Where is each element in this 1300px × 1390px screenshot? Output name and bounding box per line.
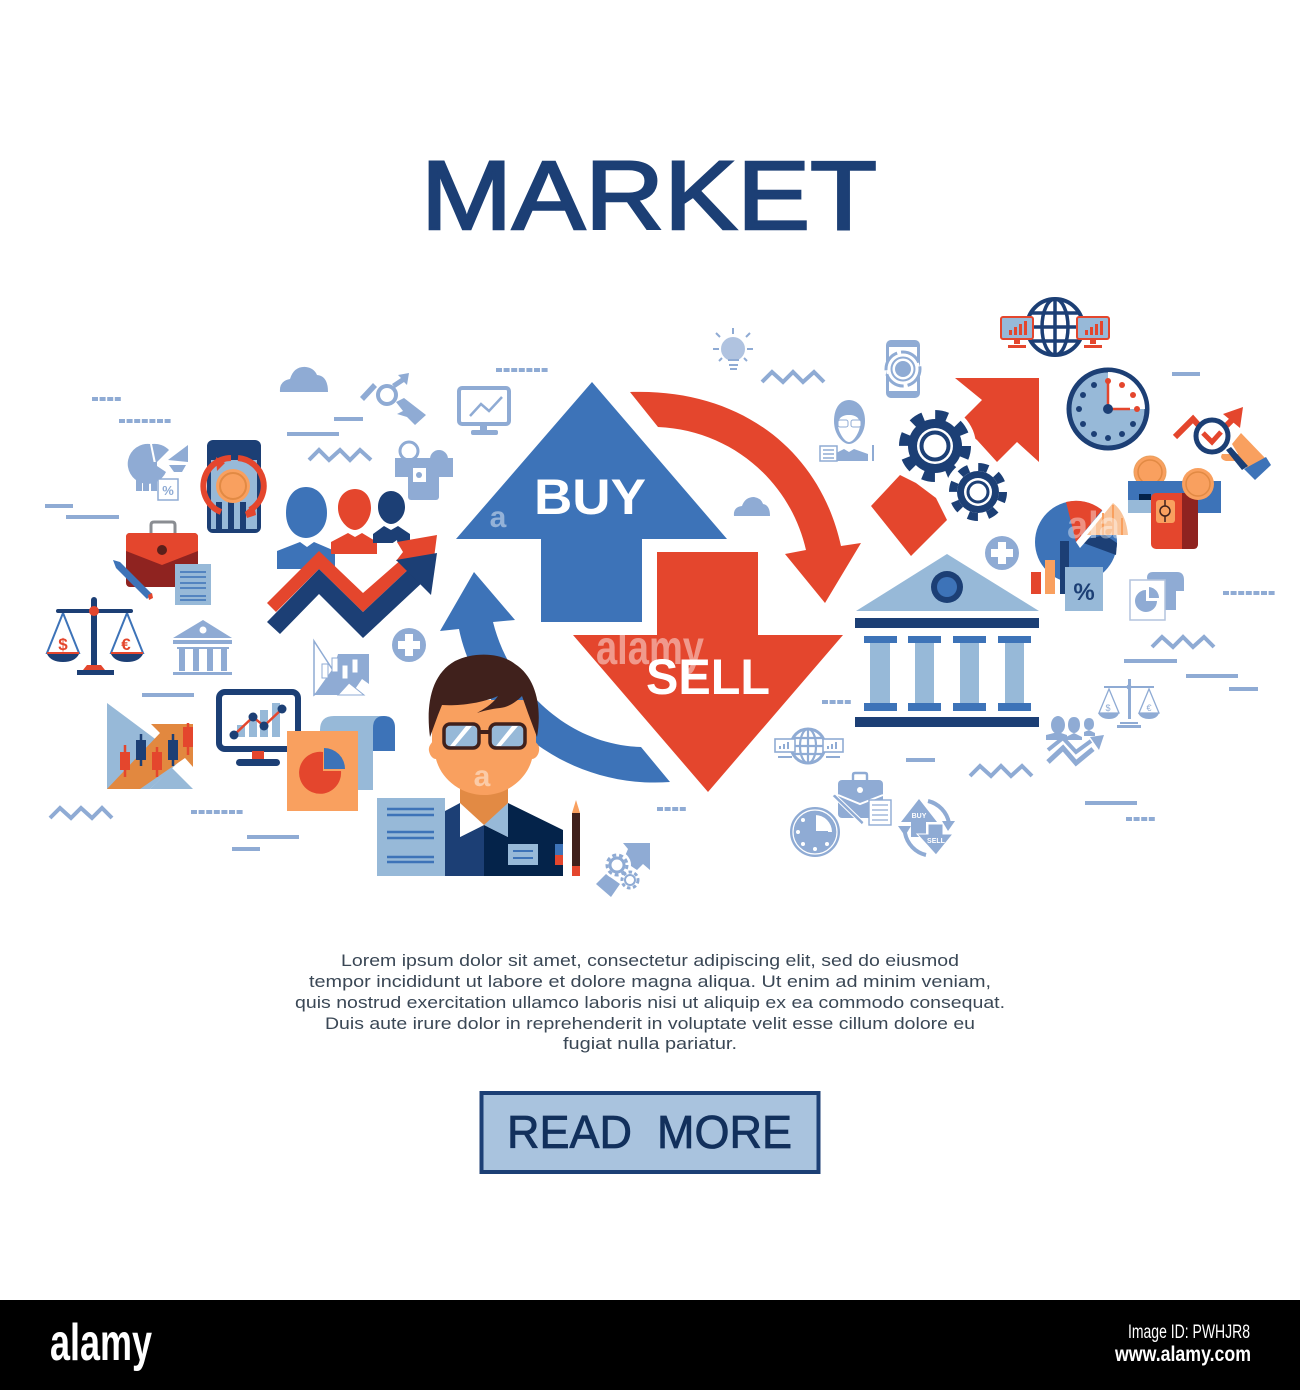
body text: tempor incididunt ut labore et dolore magna aliqua. Ut enim ad minim veniam,: [309, 972, 991, 991]
person navy: [373, 491, 410, 543]
icon: small scales pale: €: [1146, 703, 1152, 713]
icon: report with pie chart: [287, 716, 395, 811]
icon: wallet and coins: [1128, 456, 1221, 549]
icon: monitor with chart pale: [459, 388, 509, 435]
icon: magnifier and hand pale: [360, 373, 426, 425]
icon: cloud left: [280, 367, 328, 392]
icon: small clock pale: [791, 808, 839, 856]
icon: globe with monitors: [1001, 299, 1109, 355]
icon: report with pie pale: [1130, 572, 1184, 620]
button: read more: READ MORE: [507, 1106, 792, 1158]
footer bar: [0, 1300, 1300, 1390]
icon: scales with dollar and euro: [47, 597, 143, 675]
icon: small person pale: [820, 400, 874, 461]
image id: Image ID: PWHJR8: [1128, 1322, 1250, 1343]
pencil: [572, 800, 580, 876]
icon: people and zigzag pale: [1046, 716, 1104, 763]
arrow red: [267, 551, 412, 612]
icon: small bank pale: [173, 620, 232, 675]
icon: pie chart and percent pale: [128, 444, 188, 500]
icon: briefcase with pencil and document: [113, 522, 211, 605]
icon: pie chart and percent pale: %: [162, 483, 174, 498]
document: [377, 798, 445, 876]
arrow: blue curved: [440, 572, 670, 783]
arrow: buy: BUY: [534, 469, 646, 525]
icon: candlestick chart pale: [314, 641, 369, 695]
icon: phone with cycle pale: [886, 340, 920, 398]
gear small: [945, 459, 1011, 525]
illustration: businessman: [377, 655, 580, 876]
icon: clock: [1069, 370, 1147, 448]
person red: [331, 489, 377, 554]
arrow: red curved: [630, 392, 861, 603]
icon: small scales pale: $: [1105, 703, 1111, 713]
icon: small buy and sell cycle pale: BUY: [912, 813, 927, 820]
illustration: businessman: a: [474, 760, 491, 793]
body text: [295, 951, 1005, 1053]
face: [429, 700, 539, 795]
icon: small scales pale: [1098, 679, 1159, 728]
icon: cloud centre: [734, 497, 770, 516]
body text: Duis aute irure dolor in reprehenderit in voluptate velit esse cillum dolore eu: [325, 1014, 975, 1033]
collar: [460, 803, 484, 837]
website: www.alamy.com: [1114, 1343, 1251, 1366]
button: read more: [482, 1093, 818, 1172]
hair: [429, 655, 539, 737]
body text: fugiat nulla pariatur.: [563, 1034, 737, 1053]
icon: small briefcase pale: [832, 773, 891, 825]
arrow: sell: SELL: [646, 649, 770, 705]
icon: scales with dollar and euro: €: [121, 635, 131, 654]
person blue: [277, 487, 335, 569]
arrow: sell: alamy: [596, 622, 704, 675]
icon: big candlestick chart: [107, 703, 193, 789]
jacket: [445, 803, 484, 876]
arrow: buy: a: [490, 501, 507, 534]
chart: pie with bars and percent: [1031, 499, 1128, 611]
arrow: sell: [573, 552, 843, 792]
title: MARKET: [421, 141, 877, 250]
neck: [460, 780, 508, 829]
icon: scales with dollar and euro: $: [58, 635, 68, 654]
chart: pie with bars and percent: ala: [1067, 505, 1121, 547]
footer logo: alamy: [50, 1314, 152, 1372]
icon: hand with magnifier and trend: [1175, 407, 1271, 480]
glasses: [444, 724, 525, 748]
icon: monitor with growth chart: [219, 692, 298, 766]
icon: light bulb pale: [713, 328, 753, 369]
body text: quis nostrud exercitation ullamco laboris nisi ut aliquip ex ea commodo consequat.: [295, 993, 1005, 1012]
arrow: buy: [456, 382, 727, 622]
icon: people and rising zigzag arrows: [267, 487, 437, 638]
icon: phone with coin cycle: [203, 440, 264, 533]
gear large: [894, 405, 976, 487]
body text: Lorem ipsum dolor sit amet, consectetur adipiscing elit, sed do eiusmod: [341, 951, 959, 970]
icon: big arrow with gears: [871, 378, 1039, 556]
bank: large: [855, 554, 1039, 727]
icon: plus left: [392, 628, 426, 662]
white gap behind arrowhead: [377, 540, 401, 574]
icon: plus right: [985, 536, 1019, 570]
icon: small buy and sell cycle pale: SELL: [927, 838, 946, 845]
chart: pie with bars and percent: %: [1073, 579, 1095, 606]
icon: small buy and sell cycle pale: [898, 799, 955, 855]
icon: small globe pale: [775, 729, 843, 763]
arrow navy: [267, 566, 425, 638]
icon: wallet and coins pale: [395, 442, 453, 500]
icon: small gears and arrow pale: [596, 843, 650, 897]
badge: [508, 844, 538, 865]
